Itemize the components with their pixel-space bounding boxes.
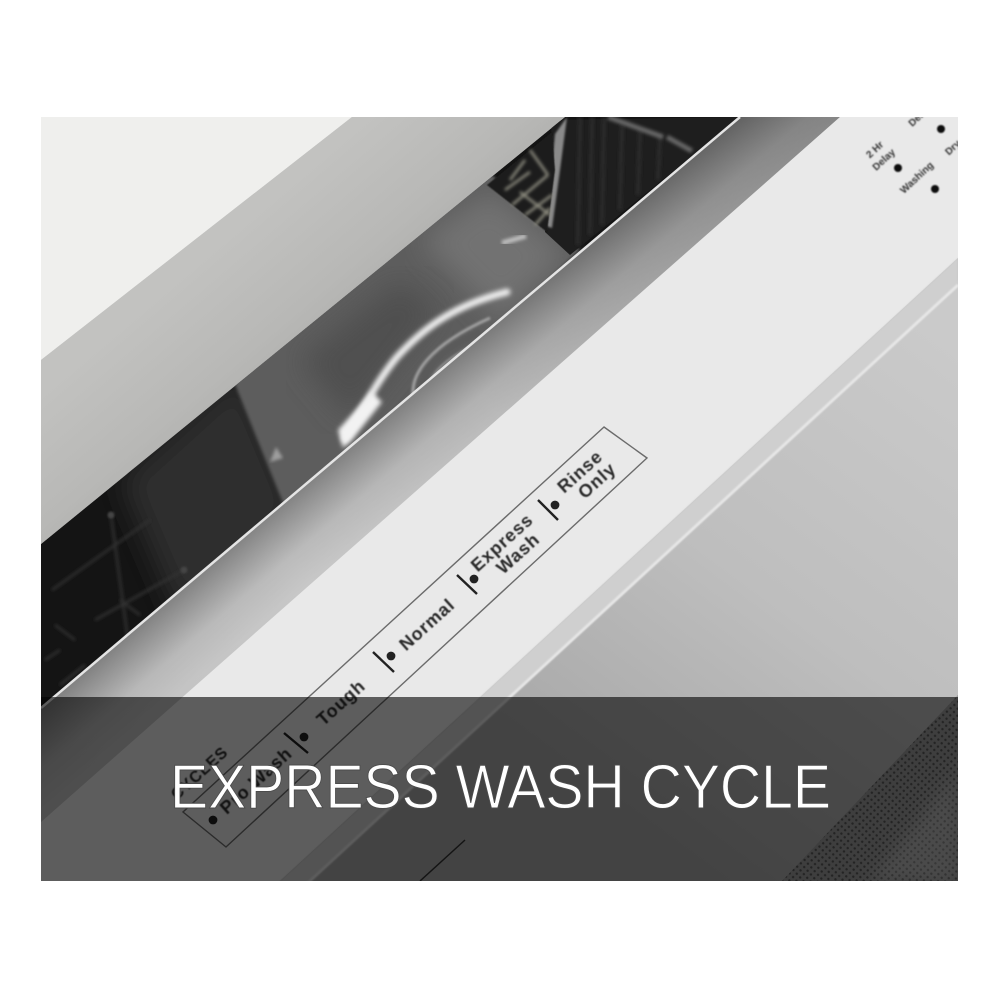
spray arm bowl — [225, 165, 580, 520]
tangled wires — [487, 132, 555, 232]
rack vertical bars — [578, 117, 660, 245]
white control panel face — [41, 117, 958, 881]
cycle names: Rinse — [553, 446, 607, 497]
drain rings — [413, 318, 490, 400]
caption banner — [41, 697, 958, 881]
rack top rails — [608, 117, 692, 151]
cycle names: Pro Wash — [216, 743, 296, 818]
highlight base — [338, 392, 382, 448]
cycle names: Tough — [313, 676, 369, 729]
photo: dishwasher control panel — [41, 103, 963, 900]
status indicators: Dry — [943, 138, 963, 158]
door reflection — [878, 782, 958, 881]
label outline — [183, 427, 647, 847]
small glint — [502, 236, 526, 243]
rack in back of tub — [545, 117, 740, 255]
status indicators — [865, 117, 958, 194]
white upper door — [41, 117, 352, 360]
panel lower highlight strip — [270, 258, 958, 890]
vertical light post — [546, 117, 567, 228]
lower door surface — [314, 288, 958, 881]
cycle selector label — [168, 427, 647, 847]
gray door edge — [41, 117, 565, 544]
selector dots — [209, 501, 559, 824]
dish rack wires — [45, 518, 168, 686]
cycle names: Express — [467, 510, 537, 576]
white rim line — [41, 117, 740, 708]
bright door line — [300, 285, 958, 890]
cycle names — [168, 446, 620, 818]
title: EXPRESS WASH CYCLE — [170, 753, 831, 822]
door groove — [420, 840, 465, 881]
glossy highlight — [345, 292, 507, 438]
divider bars — [284, 500, 558, 753]
status indicators: Delay — [871, 147, 898, 173]
cycle names: Normal — [395, 595, 459, 655]
tan wire strands — [505, 150, 552, 225]
perforated door pattern — [782, 695, 958, 881]
band shading along rim — [41, 117, 824, 762]
cycle names: Wash — [492, 529, 544, 578]
triangle glint — [270, 447, 283, 462]
status indicators: 2 Hr — [864, 139, 886, 161]
cycle names: Only — [574, 459, 620, 503]
rack highlights — [108, 512, 114, 518]
gray panel top band — [152, 117, 840, 696]
dishwasher interior — [41, 117, 740, 708]
cycle names: CYCLES — [168, 744, 232, 803]
status indicators: Washing — [898, 160, 936, 196]
dark lower-left tub shading — [114, 378, 282, 600]
status indicators: Delay — [907, 103, 934, 129]
